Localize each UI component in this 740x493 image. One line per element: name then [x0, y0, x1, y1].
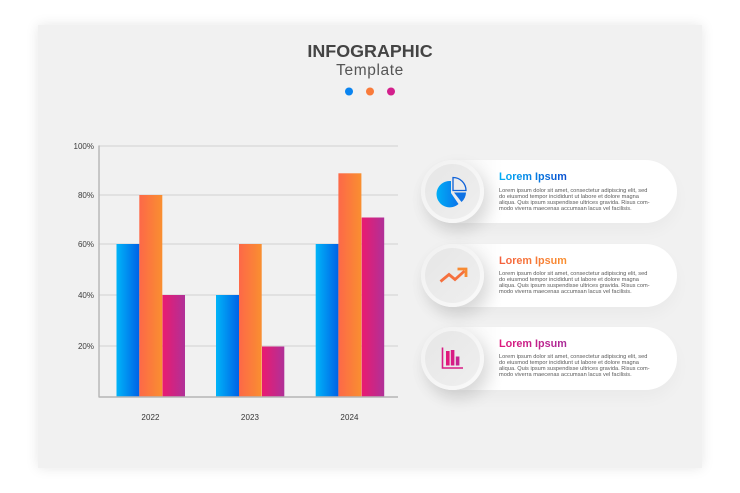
y axis label 80%: 80%	[78, 191, 94, 200]
icon: pie chart	[421, 160, 484, 223]
text block: Lorem ipsum dolor sit amet, consectetur adipiscing elit, sed	[499, 188, 647, 194]
bar chart	[98, 145, 398, 398]
y axis label 100%: 100%	[74, 142, 94, 151]
x axis label 2022: 2022	[141, 412, 160, 422]
text block: modo viverra maecenas accumsan lacus vel facilisis.	[499, 289, 632, 295]
panel: item 2	[421, 244, 677, 306]
text block: do eiusmod tempor incididunt ut labore et dolore magna	[499, 194, 639, 200]
text block: do eiusmod tempor incididunt ut labore et dolore magna	[499, 360, 639, 366]
y axis label 60%: 60%	[78, 240, 94, 249]
subtitle: Template	[336, 62, 404, 79]
panel: item 1	[421, 160, 677, 223]
icon: bar chart	[421, 326, 484, 390]
text block: aliqua. Quis ipsum suspendisse ultrices gravida. Risus com-	[499, 283, 650, 289]
x axis label 2023: 2023	[241, 412, 259, 422]
text block: Lorem ipsum dolor sit amet, consectetur adipiscing elit, sed	[499, 354, 647, 360]
text block	[499, 354, 650, 378]
text block: modo viverra maecenas accumsan lacus vel facilisis.	[499, 206, 632, 212]
decorative legend dots	[345, 88, 395, 96]
title: INFOGRAPHIC	[307, 41, 433, 61]
text block: Lorem ipsum dolor sit amet, consectetur adipiscing elit, sed	[499, 271, 647, 277]
heading: Lorem Ipsum	[499, 338, 567, 350]
icon: trend arrow	[421, 244, 484, 306]
panel: item 3	[421, 326, 677, 390]
text block: do eiusmod tempor incididunt ut labore et dolore magna	[499, 277, 639, 283]
y axis label 20%: 20%	[78, 342, 94, 351]
x axis label 2024: 2024	[340, 412, 359, 422]
heading: Lorem Ipsum	[499, 171, 567, 183]
heading: Lorem Ipsum	[499, 254, 567, 266]
text block	[499, 271, 650, 295]
text block: aliqua. Quis ipsum suspendisse ultrices gravida. Risus com-	[499, 366, 650, 372]
text block: modo viverra maecenas accumsan lacus vel facilisis.	[499, 372, 632, 378]
text block: aliqua. Quis ipsum suspendisse ultrices gravida. Risus com-	[499, 200, 650, 206]
y axis label 40%: 40%	[78, 291, 94, 300]
text block	[499, 188, 650, 212]
